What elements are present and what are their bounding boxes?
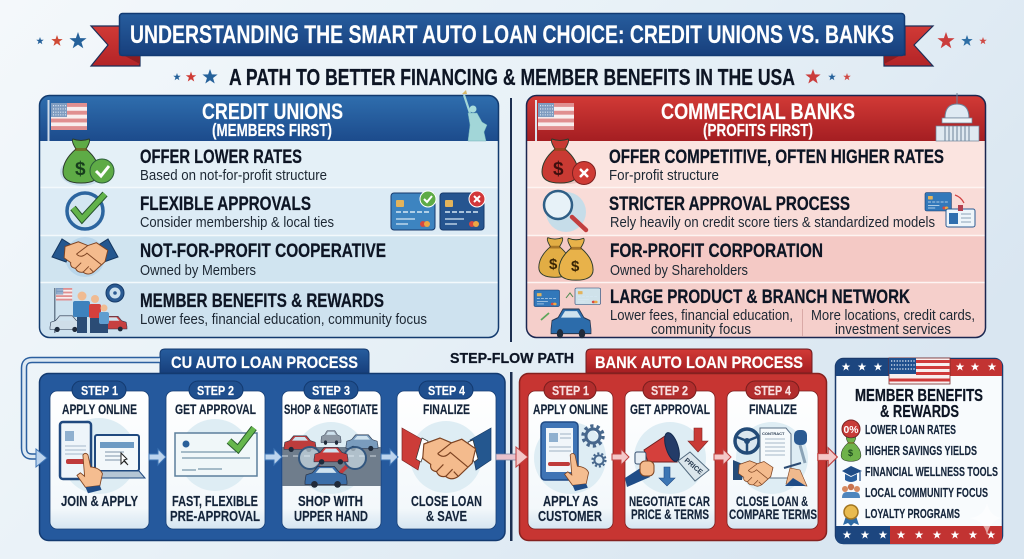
row: cooperative: Owned by Members bbox=[140, 262, 256, 279]
title stars right bbox=[937, 32, 987, 48]
benefit: lower loan rates bbox=[842, 420, 956, 438]
step pills: STEP 2 bbox=[197, 383, 234, 398]
step labels: & SAVE bbox=[426, 508, 467, 525]
heading: member benefits: & REWARDS bbox=[880, 401, 959, 421]
row: higher rates: $ bbox=[553, 159, 564, 180]
heading: commercial banks: COMMERCIAL BANKS bbox=[661, 99, 855, 124]
row: cooperative: NOT-FOR-PROFIT COOPERATIVE bbox=[140, 241, 386, 262]
step labels: FINALIZE bbox=[749, 402, 797, 417]
arrow: bank to benefits bbox=[818, 448, 837, 466]
row: flexible approvals bbox=[67, 191, 485, 231]
row: stricter approval bbox=[544, 191, 975, 232]
panel: bank auto loan process: BANK AUTO LOAN PROCESS bbox=[595, 353, 803, 372]
arrow: CU to bank bbox=[496, 447, 528, 467]
row: offer lower rates: Based on not-for-profit structure bbox=[140, 167, 327, 184]
benefit: local community focus bbox=[842, 484, 988, 500]
heading: credit unions: (MEMBERS FIRST) bbox=[212, 120, 332, 140]
bottom band with stars bbox=[836, 526, 1002, 544]
step 3 card bbox=[282, 391, 381, 529]
step labels: CLOSE LOAN bbox=[411, 493, 482, 510]
row: higher rates: OFFER COMPETITIVE, OFTEN HIGHER RATES bbox=[609, 147, 944, 168]
benefit: loyalty programs: LOYALTY PROGRAMS bbox=[865, 506, 960, 521]
icon: statue of liberty bbox=[462, 90, 487, 141]
heading: member benefits: MEMBER BENEFITS bbox=[855, 385, 983, 405]
row: offer lower rates bbox=[60, 139, 327, 186]
step labels: APPLY ONLINE bbox=[533, 402, 608, 417]
divider between panels bbox=[510, 98, 512, 342]
row: for-profit corporation: $ bbox=[549, 256, 558, 273]
step 4 card bbox=[727, 391, 818, 529]
step labels bbox=[61, 402, 482, 525]
step pills: STEP 1 bbox=[552, 383, 589, 398]
row: offer lower rates: OFFER LOWER RATES bbox=[140, 147, 302, 168]
step labels: NEGOTIATE CAR bbox=[629, 493, 710, 509]
step labels: FINALIZE bbox=[423, 402, 470, 417]
step 2 card bbox=[625, 391, 715, 529]
step-flow path label: STEP-FLOW PATH bbox=[450, 350, 574, 367]
panel: bank auto loan process bbox=[520, 349, 826, 540]
row: member benefits: Lower fees, financial education, community focus bbox=[140, 311, 427, 328]
row: member benefits: MEMBER BENEFITS & REWARDS bbox=[140, 291, 384, 312]
divider beside CU process bbox=[510, 372, 512, 541]
row: stricter approval: STRICTER APPROVAL PROCESS bbox=[609, 194, 850, 215]
step labels: FAST, FLEXIBLE bbox=[172, 493, 258, 510]
step 4 card bbox=[397, 391, 496, 529]
row: flexible approvals: Consider membership & local ties bbox=[140, 214, 334, 231]
icon: flag bbox=[48, 100, 87, 141]
row: cooperative bbox=[52, 237, 386, 279]
icon: capitol building bbox=[936, 93, 979, 141]
benefit: higher savings yields: HIGHER SAVINGS YIELDS bbox=[865, 443, 977, 458]
step 1 card bbox=[528, 391, 613, 529]
panel: credit unions bbox=[40, 90, 498, 338]
icon: card and id bbox=[925, 192, 975, 227]
step pills bbox=[72, 381, 473, 399]
row: for-profit corporation: $ bbox=[571, 258, 580, 275]
row: for-profit corporation: Owned by Shareholders bbox=[610, 262, 748, 279]
title stars left bbox=[36, 32, 87, 48]
step pills: STEP 4 bbox=[428, 383, 466, 398]
benefit: lower loan rates: LOWER LOAN RATES bbox=[865, 422, 956, 437]
heading: commercial banks: (PROFITS FIRST) bbox=[703, 120, 813, 140]
step labels: GET APPROVAL bbox=[630, 402, 710, 417]
row: stricter approval: Rely heavily on credit score tiers & standardized models bbox=[610, 214, 935, 231]
icon: flag bbox=[535, 100, 574, 141]
arrow: loop from process tab to step 1 bbox=[24, 360, 160, 467]
row: higher rates: For-profit structure bbox=[609, 167, 719, 184]
step labels bbox=[533, 402, 817, 525]
step pills: STEP 2 bbox=[651, 383, 688, 398]
row: for-profit corporation bbox=[539, 238, 823, 280]
row: member benefits bbox=[50, 284, 427, 333]
step labels: UPPER HAND bbox=[294, 508, 368, 525]
step 1 card bbox=[50, 391, 149, 529]
step labels: CLOSE LOAN & bbox=[736, 493, 808, 509]
row: offer lower rates: $ bbox=[75, 159, 86, 180]
benefit: loyalty programs bbox=[843, 505, 960, 526]
step pills: STEP 4 bbox=[754, 383, 792, 398]
step labels: SHOP WITH bbox=[298, 493, 363, 510]
row: product and branch network: community focus bbox=[651, 321, 751, 338]
row: product and branch network: LARGE PRODUCT & BRANCH NETWORK bbox=[610, 287, 910, 308]
icon: sparkle watermark bbox=[969, 503, 1002, 535]
row: product and branch network bbox=[534, 287, 975, 338]
subtitle: A PATH TO BETTER FINANCING & MEMBER BENEFITS IN THE USA bbox=[229, 64, 795, 90]
row: flexible approvals: FLEXIBLE APPROVALS bbox=[140, 194, 311, 215]
step pills bbox=[544, 381, 799, 399]
row: for-profit corporation: FOR-PROFIT CORPORATION bbox=[610, 241, 823, 262]
icon: approved and declined cards bbox=[391, 191, 485, 230]
benefit: lower loan rates: 0% bbox=[844, 425, 859, 436]
heading: credit unions bbox=[202, 99, 343, 140]
panel: CU auto loan process bbox=[40, 349, 505, 540]
step labels: JOIN & APPLY bbox=[61, 493, 138, 510]
row: product and branch network: More locations, credit cards, bbox=[811, 307, 975, 324]
panel: commercial banks bbox=[526, 93, 986, 338]
heading: commercial banks bbox=[661, 99, 855, 140]
heading: member benefits bbox=[855, 385, 983, 421]
step labels: SHOP & NEGOTIATE bbox=[284, 402, 378, 417]
step labels: PRICE & TERMS bbox=[631, 506, 709, 522]
arrows between bank steps bbox=[612, 449, 731, 465]
step labels: APPLY ONLINE bbox=[62, 402, 137, 417]
step labels: GET APPROVAL bbox=[175, 402, 256, 417]
step 2 card bbox=[166, 391, 265, 529]
row: higher rates bbox=[542, 139, 944, 184]
top band with flag bbox=[836, 358, 1002, 384]
heading: credit unions: CREDIT UNIONS bbox=[202, 99, 343, 124]
step pills: STEP 3 bbox=[312, 383, 350, 398]
step labels: PRE-APPROVAL bbox=[170, 508, 260, 525]
benefit: higher savings yields: $ bbox=[848, 448, 853, 458]
panel: CU auto loan process: CU AUTO LOAN PROCESS bbox=[171, 353, 358, 372]
benefit: financial wellness tools bbox=[842, 464, 998, 482]
step labels: COMPARE TERMS bbox=[729, 506, 817, 522]
step 2 card: PRICE bbox=[683, 457, 704, 476]
benefit: higher savings yields bbox=[841, 437, 977, 461]
step labels: CUSTOMER bbox=[538, 508, 602, 525]
step 4 card: CONTRACT bbox=[762, 431, 785, 436]
title banner bbox=[91, 14, 933, 66]
arrows between CU steps bbox=[149, 449, 398, 465]
step pills: STEP 1 bbox=[81, 383, 118, 398]
row: product and branch network: investment services bbox=[835, 321, 951, 338]
row: product and branch network: Lower fees, financial education, bbox=[610, 307, 793, 324]
step labels: APPLY AS bbox=[543, 493, 598, 510]
panel: member benefits and rewards bbox=[836, 358, 1002, 544]
